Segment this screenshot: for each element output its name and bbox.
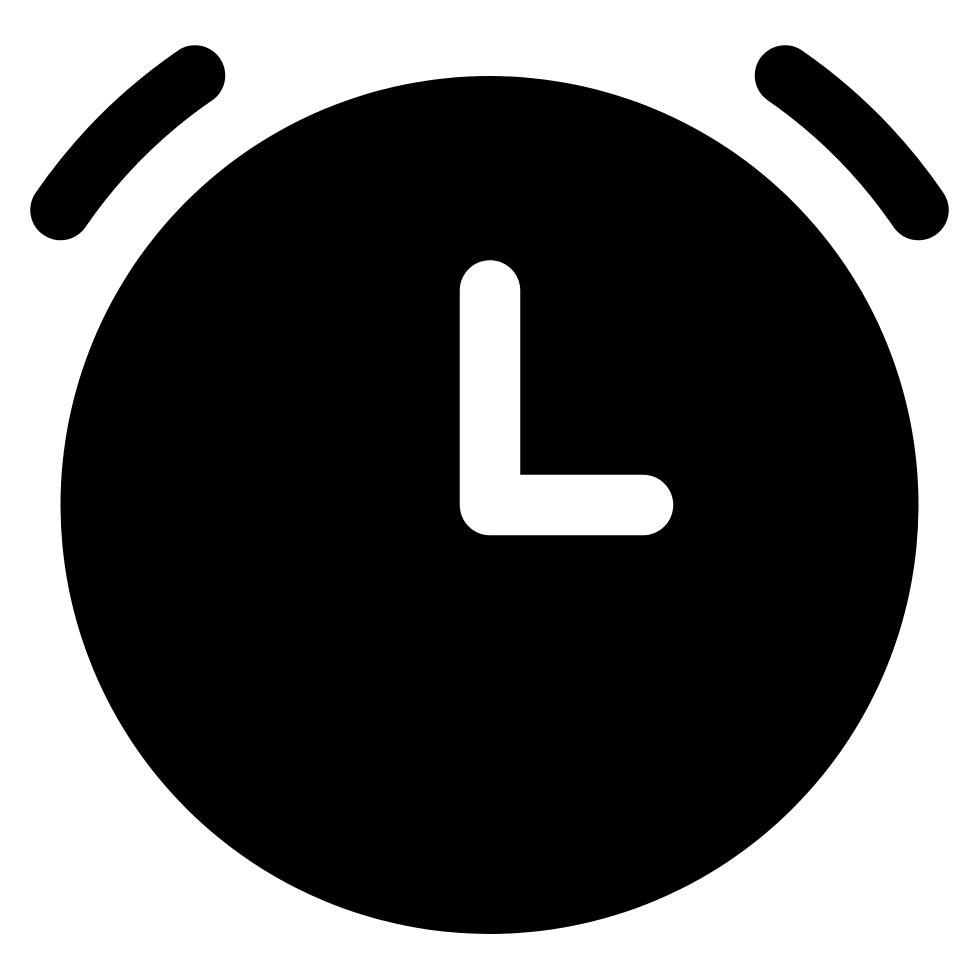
right bell arc: [785, 76, 918, 210]
clock face: [60, 76, 918, 934]
clock hands: [490, 290, 643, 505]
left bell arc: [60, 76, 195, 210]
